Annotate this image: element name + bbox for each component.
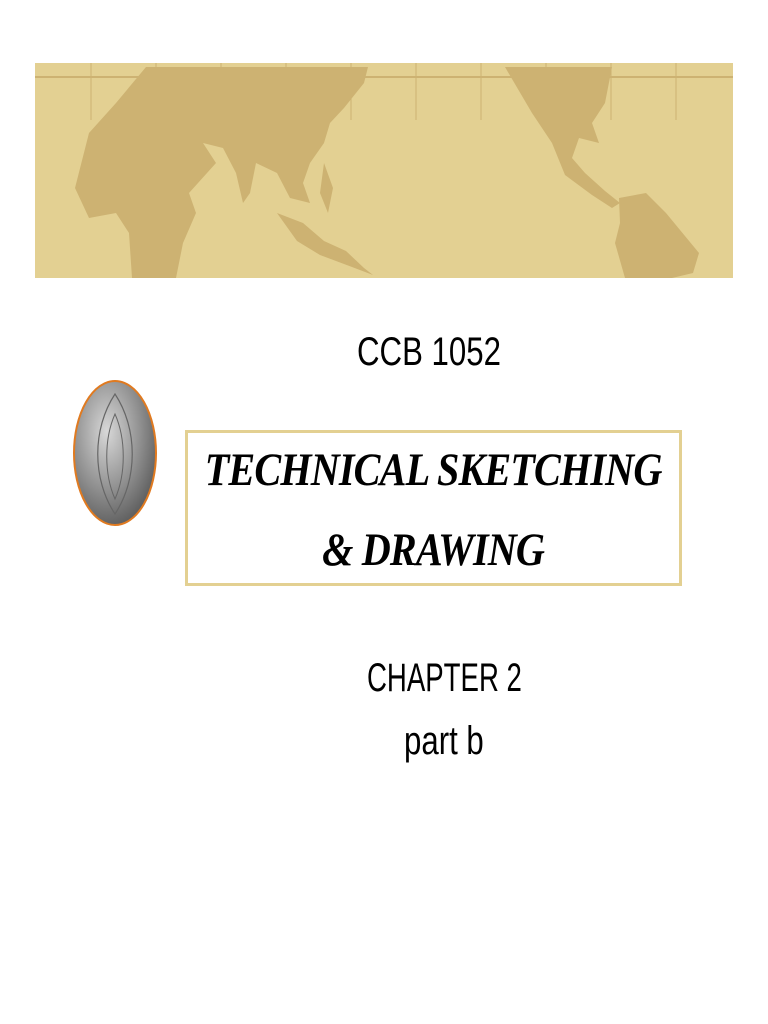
icon: silver emblem [73,380,157,526]
title box [185,430,682,586]
title text: & DRAWING [322,524,544,576]
N America [505,67,620,208]
S America [615,193,699,278]
chapter label: CHAPTER 2 [367,656,522,700]
course code: CCB 1052 [357,330,501,374]
banner: world map [35,63,733,278]
title text: TECHNICAL SKETCHING [205,444,662,496]
part label: part b [404,719,484,763]
Africa + Eurasia [75,67,368,278]
SE Asia / Indonesia [277,213,373,275]
title text [205,444,662,576]
